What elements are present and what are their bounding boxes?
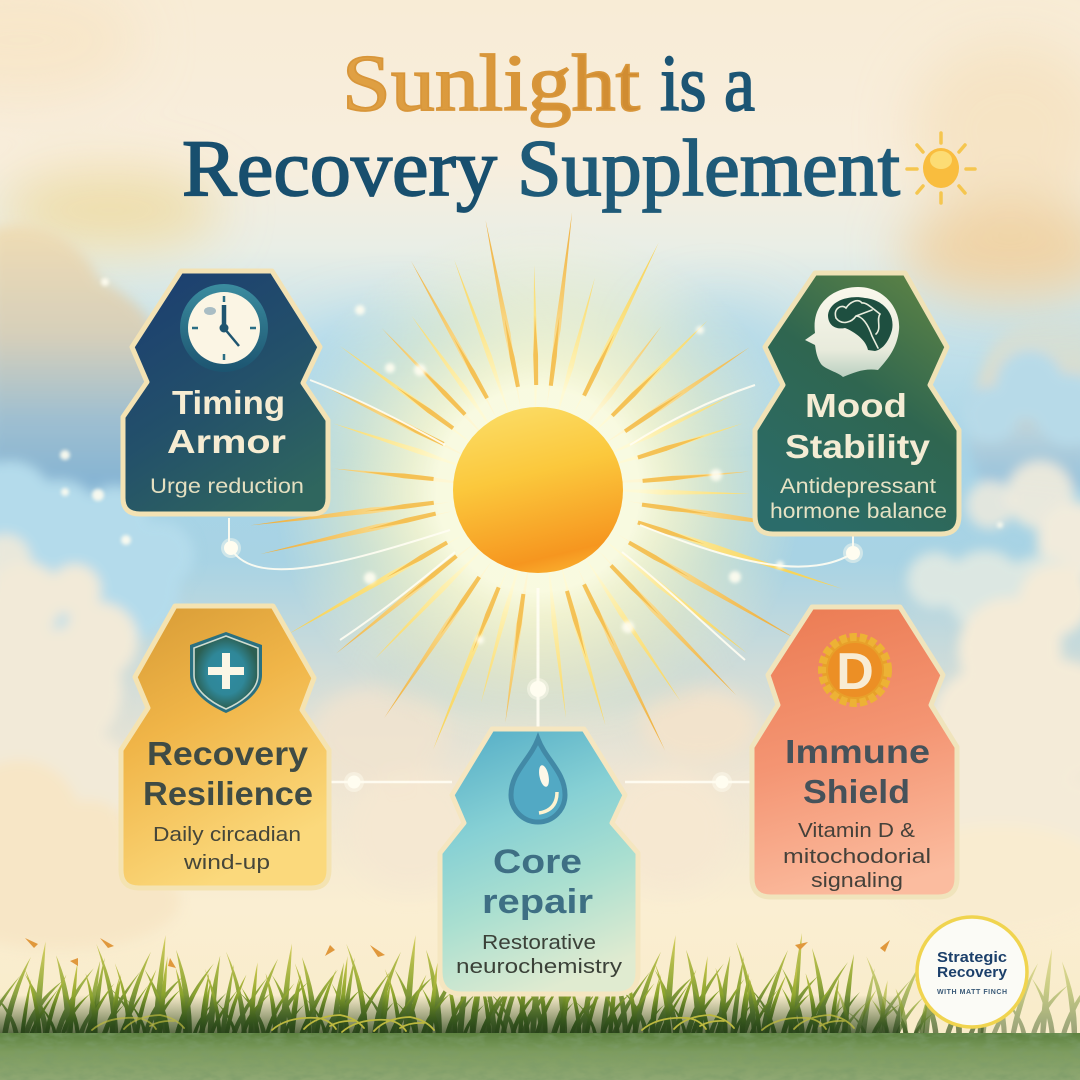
description: Vitamin D & <box>798 820 916 842</box>
heading <box>785 387 931 465</box>
heading: Resilience <box>143 775 313 812</box>
sun glow <box>273 225 803 755</box>
sun rays inner tips above the glow <box>364 315 713 664</box>
heading: Core <box>493 843 582 881</box>
description: mitochodorial <box>783 846 931 868</box>
description <box>783 820 931 892</box>
panel: Core repair <box>440 729 638 994</box>
heading: Armor <box>167 423 286 460</box>
heading <box>143 735 313 812</box>
icon: clock <box>180 284 268 372</box>
description: hormone balance <box>770 500 947 523</box>
heading: Recovery <box>147 735 309 772</box>
title: Sunlight <box>342 40 640 128</box>
sun disc <box>453 407 623 573</box>
sparkles and connector nodes <box>60 278 1003 792</box>
sun rays <box>250 212 843 752</box>
logo badge <box>917 917 1027 1027</box>
logo badge: Strategic <box>937 949 1007 966</box>
description <box>770 475 947 523</box>
logo badge: Recovery <box>937 964 1008 981</box>
heading: Mood <box>805 387 907 424</box>
heading: Stability <box>785 428 931 465</box>
description <box>456 932 622 978</box>
panel: Immune Shield <box>752 607 957 897</box>
title: is a <box>660 40 755 128</box>
description <box>153 824 301 874</box>
icon: water drop <box>511 739 565 822</box>
heading: Immune <box>785 733 930 770</box>
panel: Mood Stability <box>755 273 959 534</box>
icon: vitamin D medal: D <box>836 643 874 701</box>
heading: repair <box>482 883 593 921</box>
icon: head with brain <box>805 287 899 377</box>
heading <box>785 733 930 810</box>
title: Supplement <box>517 125 900 213</box>
heading <box>167 384 286 460</box>
description: signaling <box>811 870 903 892</box>
logo badge: WITH MATT FINCH <box>937 989 1007 996</box>
heading: Timing <box>172 384 285 421</box>
panel: Recovery Resilience <box>121 606 329 888</box>
clouds centre <box>310 625 760 890</box>
title: Recovery <box>182 125 497 213</box>
panel: Timing Armor <box>123 271 328 514</box>
description: Daily circadian <box>153 824 301 846</box>
connector lines <box>229 380 853 782</box>
icon: vitamin D medal <box>822 637 888 703</box>
description: Urge reduction <box>150 475 304 498</box>
description: Restorative <box>482 932 596 954</box>
title <box>182 40 900 213</box>
description: wind-up <box>183 852 270 874</box>
description: Antidepressant <box>780 475 936 498</box>
clouds left <box>0 226 194 950</box>
heading: Shield <box>803 773 910 810</box>
description: neurochemistry <box>456 956 622 978</box>
icon: small title sun <box>907 133 975 203</box>
heading <box>482 843 593 921</box>
icon: shield with plus <box>190 632 262 713</box>
clouds right <box>890 320 1080 935</box>
grass and ground <box>0 933 1080 1080</box>
